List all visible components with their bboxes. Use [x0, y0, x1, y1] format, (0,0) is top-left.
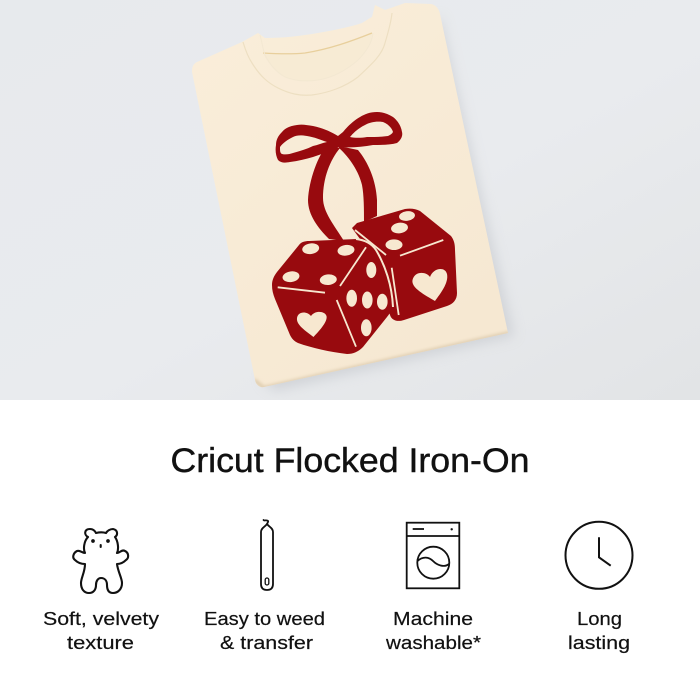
label: soft velvety texture: texture	[67, 632, 134, 653]
ribbon left tail	[308, 144, 344, 241]
label: long lasting: lasting	[568, 632, 630, 653]
icon: teddy bear	[73, 529, 128, 593]
right die	[352, 209, 457, 321]
ribbon bow	[276, 112, 402, 163]
ribbon right tail	[339, 146, 377, 222]
icon: washing machine	[407, 523, 459, 588]
label: machine washable: washable*	[385, 632, 481, 653]
label: long lasting: Long	[577, 608, 622, 629]
icon: clock	[566, 522, 632, 589]
label: easy to weed and transfer: & transfer	[220, 632, 313, 653]
feature: soft velvety texture	[43, 529, 160, 653]
photo: folded t-shirt on grey surface	[0, 0, 700, 400]
feature: long lasting	[566, 522, 632, 653]
feature: machine washable	[385, 523, 481, 653]
t-shirt	[192, 3, 510, 388]
icon: weeding tool	[261, 520, 273, 590]
feature: easy to weed and transfer	[204, 520, 325, 653]
title: Cricut Flocked Iron-On	[170, 442, 530, 480]
label: soft velvety texture: Soft, velvety	[43, 608, 160, 629]
label: easy to weed and transfer: Easy to weed	[204, 608, 325, 629]
left die	[272, 239, 394, 354]
label: machine washable: Machine	[393, 608, 473, 629]
dice and ribbon graphic	[272, 112, 457, 354]
